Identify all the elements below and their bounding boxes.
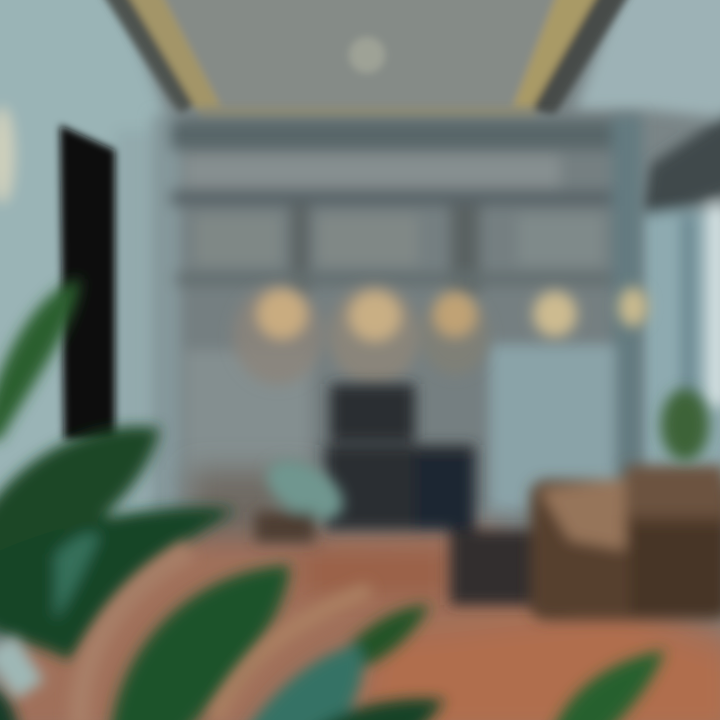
left wall [0,0,165,540]
plant leaves left [0,278,665,720]
black door [60,125,115,440]
teal chair [255,448,353,542]
pale stems and floor arcs [0,550,370,720]
shelving wall [152,115,642,515]
floor [0,470,720,720]
brown sofa [530,465,720,620]
ceiling [100,0,632,120]
pendant lights [233,285,648,385]
dark console [325,384,570,605]
small plant right [661,389,709,461]
right wall and window [575,0,720,480]
